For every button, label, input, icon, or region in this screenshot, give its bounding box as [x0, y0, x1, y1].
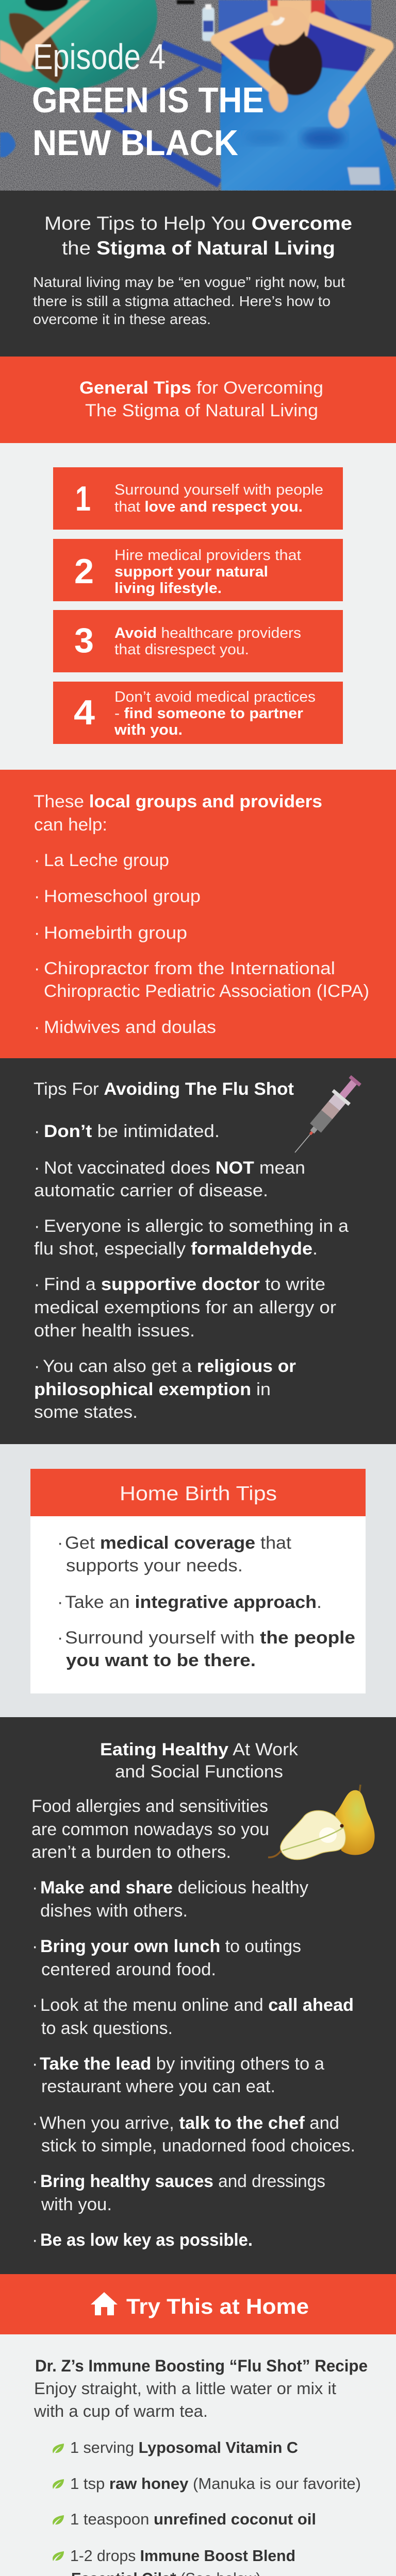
tip: take the lead [32, 2054, 324, 2096]
tip: talk to the chef: stick to simple, unadorned food choices. [41, 2136, 355, 2156]
tip 2: living lifestyle. [114, 580, 222, 597]
flu tip: allergic: Everyone is allergic to something in a [44, 1216, 349, 1236]
flu heading: Tips For Avoiding The Flu Shot [34, 1079, 294, 1099]
groups list: Homeschool group [44, 887, 201, 906]
panel: avoiding the flu shot [0, 1058, 396, 1444]
intro heading: the Stigma of Natural Living [62, 238, 335, 259]
tip: call ahead: Look at the menu online and call ahead [40, 1995, 354, 2015]
tip 1 [53, 467, 343, 530]
intro paragraph: there is still a stigma attached. Here’s how to [33, 293, 331, 309]
tip: low key: · [32, 2230, 38, 2250]
tip: talk to the chef: When you arrive, talk to the chef and [40, 2113, 339, 2133]
tip: bring your own lunch: Bring your own lunch to outings [40, 1937, 301, 1956]
tip: call ahead [32, 1995, 354, 2038]
intro paragraph [33, 274, 345, 327]
groups list: Midwives and doulas [44, 1018, 216, 1037]
eating heading: and Social Functions [115, 1762, 283, 1782]
flu tip: exemption: You can also get a religious or [43, 1357, 296, 1376]
tip: healthy sauces: with you. [41, 2195, 112, 2214]
tip: healthy sauces [32, 2172, 325, 2214]
tip: take the lead: restaurant where you can eat. [41, 2077, 275, 2096]
intro paragraph: overcome it in these areas. [33, 311, 211, 327]
tip 4: with you. [114, 722, 183, 738]
flu tip: supportive doctor: Find a supportive doctor to write [44, 1275, 325, 1294]
groups list: · [34, 887, 40, 906]
card: home birth [30, 1469, 366, 1693]
icon: pears [268, 1785, 375, 1860]
tip: medical coverage: supports your needs. [66, 1556, 243, 1575]
flu tip: don't be intimidated: Don’t be intimidated. [44, 1122, 220, 1141]
recipe intro: Dr. Z’s Immune Boosting “Flu Shot” Recipe [35, 2357, 368, 2375]
groups list: Chiropractic Pediatric Association (ICPA) [44, 981, 369, 1001]
tip 4: - find someone to partner [114, 705, 303, 722]
episode label: Episode 4 [33, 37, 166, 77]
hero title [32, 37, 264, 163]
icon: syringe [287, 1073, 365, 1159]
tip: make and share: dishes with others. [40, 1901, 188, 1921]
tip 2 [53, 539, 343, 601]
flu tip: supportive doctor: medical exemptions for an allergy or [34, 1298, 336, 1317]
tip: medical coverage: · [57, 1533, 63, 1553]
eating intro paragraph [31, 1797, 269, 1862]
groups list [34, 851, 369, 1037]
flu tip: not vaccinated: Not vaccinated does NOT mean [44, 1158, 305, 1178]
groups heading [34, 792, 322, 835]
ingredient 4 [53, 2547, 295, 2576]
tip 2: Hire medical providers that [114, 547, 301, 564]
panel: intro [0, 191, 396, 357]
panel: general tips heading: The Stigma of Natural Living [85, 401, 318, 420]
recipe intro: Enjoy straight, with a little water or mix it [34, 2379, 336, 2398]
tip 4 [53, 682, 343, 744]
flu tip: allergic: flu shot, especially formaldehyde . [34, 1239, 318, 1259]
tip: take the lead: · [32, 2054, 38, 2074]
flu tip: exemption [34, 1357, 296, 1422]
eating heading [100, 1740, 299, 1782]
flu tip: don't be intimidated: · [34, 1122, 40, 1141]
groups heading: These local groups and providers [34, 792, 322, 811]
flu tip: not vaccinated [34, 1158, 305, 1200]
card heading: Home Birth Tips [120, 1483, 277, 1505]
ingredient 3: 1 teaspoon unrefined coconut oil [70, 2510, 316, 2528]
panel: numbered general tips [0, 443, 396, 770]
groups heading: can help: [34, 815, 107, 835]
tip: healthy sauces: · [32, 2172, 38, 2191]
eating intro paragraph: aren’t a burden to others. [31, 1842, 231, 1862]
tip: talk to the chef: · [32, 2113, 38, 2133]
tip: integrative approach: Take an integrative approach . [65, 1592, 322, 1612]
groups list: · [34, 851, 40, 870]
ingredient 1: 1 serving Lyposomal Vitamin C [70, 2438, 298, 2456]
flu tip: allergic: · [34, 1216, 40, 1236]
panel: general tips heading [0, 357, 396, 443]
tip: make and share [32, 1878, 308, 1921]
tip: surround yourself: Surround yourself with the people [65, 1628, 355, 1648]
flu tip: not vaccinated: · [34, 1158, 40, 1178]
flu tip: not vaccinated: automatic carrier of disease. [34, 1181, 268, 1200]
eating heading: Eating Healthy At Work [100, 1740, 299, 1759]
eating intro paragraph: are common nowadays so you [31, 1820, 269, 1839]
panel: home birth tips [0, 1444, 396, 1717]
flu tip: allergic [34, 1216, 349, 1259]
groups list: · [34, 1018, 40, 1037]
tip 1: that love and respect you. [114, 499, 303, 515]
panel: try this at home heading [0, 2274, 396, 2334]
groups list: La Leche group [44, 851, 169, 870]
hero photo: exercise class on mats [0, 0, 396, 191]
tip 1: Surround yourself with people [114, 482, 323, 498]
recipe intro [34, 2357, 368, 2420]
recipe intro: with a cup of warm tea. [34, 2402, 208, 2420]
flu tip: supportive doctor [34, 1275, 336, 1341]
flu tip: exemption: philosophical exemption in [34, 1380, 271, 1399]
tip: bring your own lunch: · [32, 1937, 38, 1956]
groups list: · [34, 959, 40, 978]
intro paragraph: Natural living may be “en vogue” right now, but [33, 274, 345, 290]
panel: general tips heading: General Tips for Overcoming [79, 378, 323, 398]
eating intro paragraph: Food allergies and sensitivities [31, 1797, 268, 1816]
headline line 2: NEW BLACK [32, 123, 238, 163]
tip 3: 3 [74, 621, 94, 660]
panel: recipe [0, 2334, 396, 2576]
tip 3 [53, 610, 343, 672]
intro heading [44, 213, 352, 259]
tip: medical coverage: Get medical coverage that [65, 1533, 292, 1553]
tip: bring your own lunch: centered around food. [41, 1960, 216, 1979]
groups list: Homebirth group [44, 923, 187, 943]
intro heading: More Tips to Help You Overcome [44, 213, 352, 234]
tip: surround yourself: · [57, 1628, 63, 1648]
ingredient 4: 1-2 drops Immune Boost Blend [70, 2547, 295, 2565]
panel: try this at home heading: Try This at Home [126, 2294, 309, 2318]
panel: local groups and providers [0, 770, 396, 1058]
groups list: · [34, 923, 40, 943]
ingredient 2: 1 tsp raw honey (Manuka is our favorite) [70, 2475, 361, 2493]
tip: talk to the chef [32, 2113, 355, 2156]
tip: low key: Be as low key as possible. [40, 2230, 253, 2250]
groups list: Chiropractor from the International [44, 959, 335, 978]
tip: healthy sauces: Bring healthy sauces and dressings [40, 2172, 325, 2191]
icon: house [91, 2292, 118, 2315]
flu tip: exemption: · [34, 1357, 40, 1376]
tip 3: that disrespect you. [114, 641, 249, 658]
tip: integrative approach: · [57, 1592, 63, 1612]
tip: make and share: · [32, 1878, 38, 1897]
tip: surround yourself [57, 1628, 355, 1670]
headline line 1: GREEN IS THE [32, 80, 264, 120]
tip: bring your own lunch [32, 1937, 301, 1979]
tip 2: 2 [74, 552, 94, 591]
flu tip: supportive doctor: other health issues. [34, 1321, 195, 1341]
tip 2: support your natural [114, 564, 268, 580]
tip 3: Avoid healthcare providers [114, 625, 301, 641]
tip 4: Don’t avoid medical practices [114, 689, 316, 705]
tip 1: 1 [75, 479, 91, 518]
panel: eating healthy [0, 1717, 396, 2274]
flu tip: exemption: some states. [34, 1402, 138, 1422]
tip: surround yourself: you want to be there. [66, 1651, 256, 1670]
tip: call ahead: · [32, 1995, 38, 2015]
tip: take the lead: Take the lead by inviting others to a [40, 2054, 324, 2074]
tip 4: 4 [74, 693, 95, 732]
tip: medical coverage [57, 1533, 292, 1575]
flu tip: supportive doctor: · [34, 1275, 40, 1294]
tip: call ahead: to ask questions. [41, 2019, 173, 2038]
tip: make and share: Make and share delicious healthy [40, 1878, 308, 1897]
